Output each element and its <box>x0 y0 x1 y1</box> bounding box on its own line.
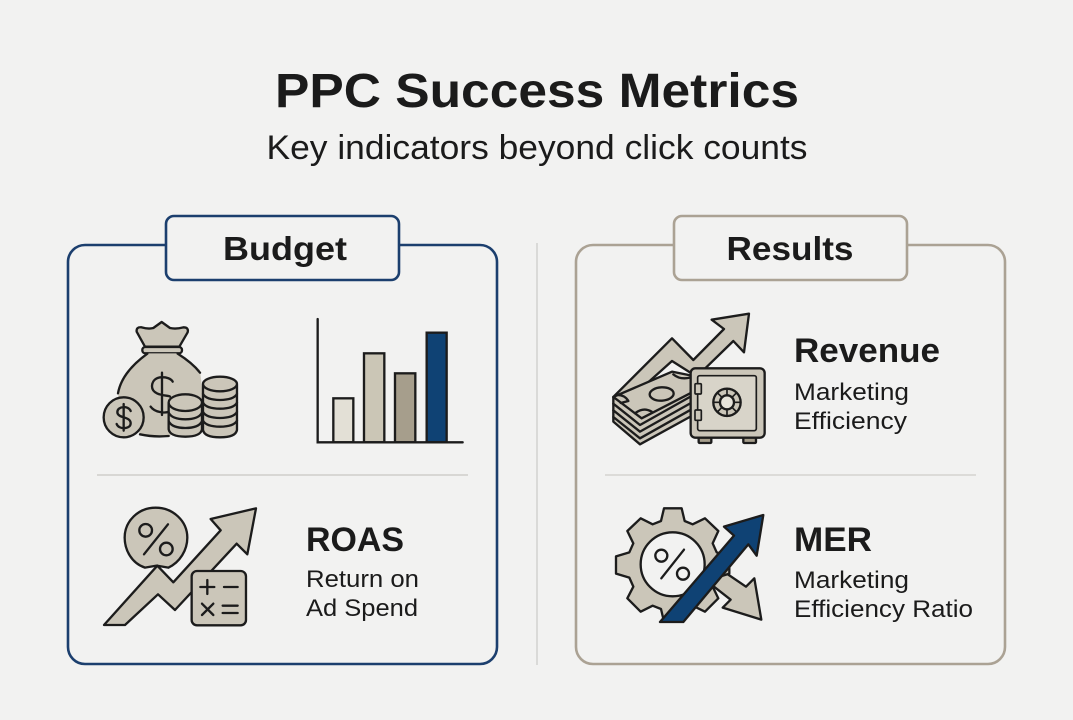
label: ROAS: Return on <box>306 566 419 593</box>
label: MER: Marketing <box>794 567 909 594</box>
label: ROAS: ROAS <box>306 521 404 559</box>
heading tab: Budget <box>166 216 399 280</box>
label: MER: MER <box>794 521 872 559</box>
label: MER: Efficiency Ratio <box>794 596 973 623</box>
heading tab: Budget: Budget <box>223 230 347 267</box>
panel: results <box>576 216 1005 664</box>
label: Revenue: Revenue <box>794 332 940 370</box>
label: Revenue: Efficiency <box>794 408 907 435</box>
title: PPC Success Metrics <box>275 65 799 118</box>
icon: gear with percent and arrows <box>616 508 763 622</box>
icon: growth arrow with percent and calculator <box>104 508 256 625</box>
bar chart <box>318 319 463 442</box>
label: Revenue <box>794 332 940 435</box>
heading tab: Results <box>674 216 907 280</box>
label: ROAS: Ad Spend <box>306 595 418 622</box>
subtitle: Key indicators beyond click counts <box>266 129 808 167</box>
label: MER <box>794 521 973 623</box>
icon: money bag with coins <box>104 322 237 437</box>
panel: budget <box>68 216 497 664</box>
heading tab: Results: Results <box>726 230 854 267</box>
icon: cash stack, safe and arrow <box>613 314 765 444</box>
label: Revenue: Marketing <box>794 379 909 406</box>
label: ROAS <box>306 521 419 622</box>
